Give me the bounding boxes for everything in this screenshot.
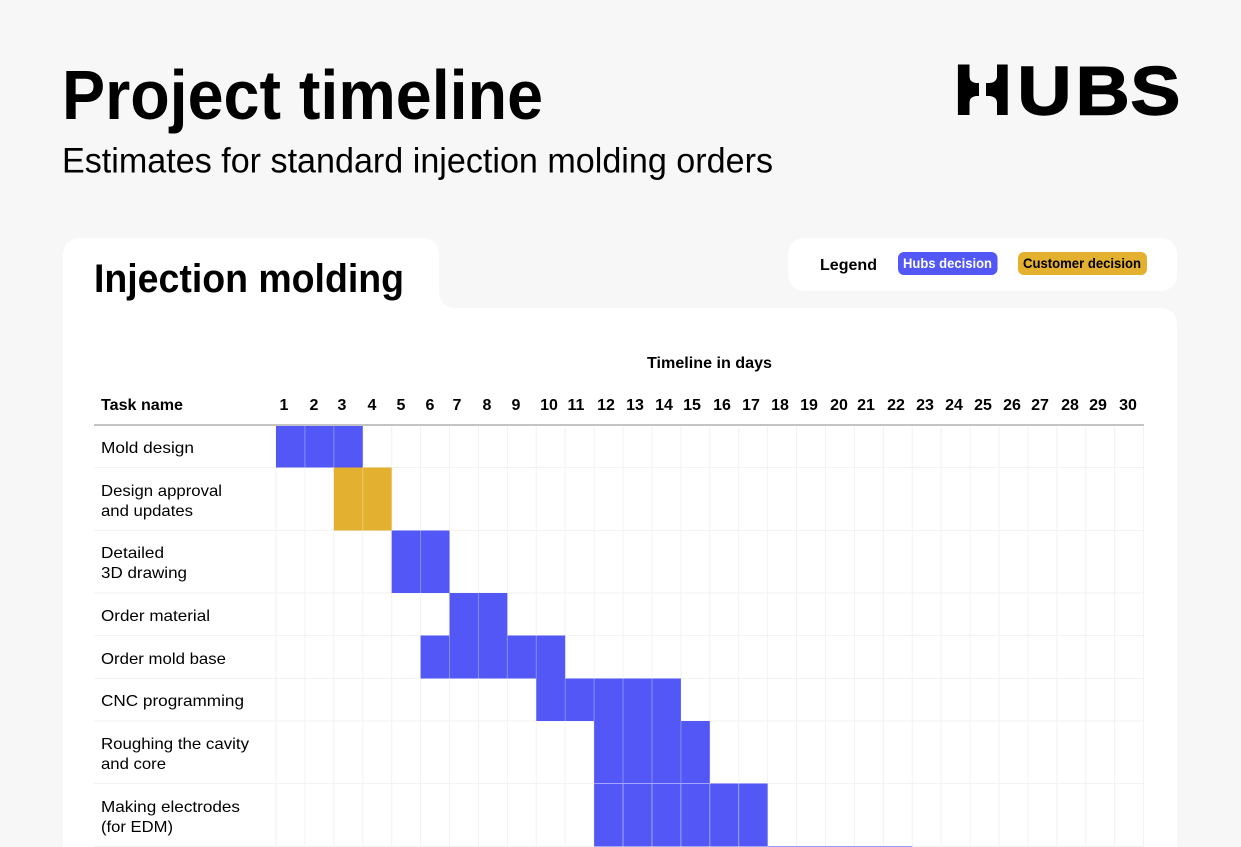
column heading: Task name: Task name [101, 397, 183, 414]
day numbers: 11 [568, 397, 585, 414]
next task bar: top edge [768, 846, 912, 847]
panel: legend: Legend [820, 257, 877, 274]
day numbers: 23 [916, 397, 934, 414]
heading: Injection molding: Injection molding [94, 257, 404, 301]
panel: legend [788, 238, 1177, 291]
task: Order material: Order material [101, 608, 210, 625]
task: Roughing the cavity and core: and core [101, 756, 166, 773]
day numbers: 16 [713, 397, 731, 414]
task: Detailed 3D drawing: 3D drawing [101, 565, 187, 582]
task: Mold design: Mold design [101, 440, 194, 457]
day numbers: 25 [974, 397, 992, 414]
task: Order mold base: Order mold base [101, 651, 226, 668]
legend item: Customer decision [1018, 252, 1147, 275]
day numbers: 29 [1089, 397, 1107, 414]
day numbers: 14 [655, 397, 673, 414]
task: Mold design [101, 426, 363, 468]
day numbers: 24 [945, 397, 963, 414]
task: Roughing the cavity and core: Roughing the cavity [101, 736, 249, 753]
day numbers: 3 [338, 397, 347, 414]
day numbers: 27 [1031, 397, 1049, 414]
legend item: Hubs decision [898, 252, 998, 275]
task: Detailed 3D drawing: Detailed [101, 545, 164, 562]
day numbers: 28 [1061, 397, 1079, 414]
task: Order material [101, 593, 507, 636]
task: Roughing the cavity and core [101, 721, 710, 784]
day numbers: 8 [483, 397, 492, 414]
day numbers: 26 [1003, 397, 1021, 414]
task: CNC programming: CNC programming [101, 693, 244, 710]
logo: Hubs [952, 49, 1180, 131]
chart heading: Timeline in days: Timeline in days [647, 355, 772, 372]
day numbers: 9 [512, 397, 521, 414]
logo: Hubs: H [952, 49, 1013, 131]
day numbers: 12 [597, 397, 615, 414]
task: Design approval and updates: and updates [101, 503, 193, 520]
day numbers: 30 [1119, 397, 1137, 414]
task: Making electrodes (for EDM): (for EDM) [101, 819, 173, 836]
day numbers: 6 [426, 397, 435, 414]
task: Order mold base [101, 636, 565, 678]
legend item: Hubs decision: Hubs decision [903, 256, 992, 271]
day numbers: 5 [397, 397, 406, 414]
logo: Hubs: UBS [1017, 53, 1180, 130]
day numbers: 18 [771, 397, 789, 414]
task: Making electrodes (for EDM): Making electrodes [101, 799, 240, 816]
day numbers: 13 [626, 397, 644, 414]
task: Detailed 3D drawing [101, 530, 450, 593]
day numbers: 22 [887, 397, 905, 414]
day numbers [280, 397, 1137, 414]
title: Project timeline [62, 56, 543, 134]
legend item: Customer decision: Customer decision [1023, 256, 1141, 271]
day numbers: 20 [830, 397, 848, 414]
day numbers: 4 [368, 397, 377, 414]
day numbers: 17 [742, 397, 760, 414]
task: Design approval and updates: Design approval [101, 483, 222, 500]
task: Making electrodes (for EDM) [101, 784, 768, 846]
day numbers: 1 [280, 397, 289, 414]
day numbers: 19 [800, 397, 818, 414]
day numbers: 21 [857, 397, 875, 414]
day numbers: 10 [540, 397, 558, 414]
day numbers: 7 [453, 397, 462, 414]
day numbers: 2 [310, 397, 319, 414]
day numbers: 15 [683, 397, 701, 414]
task: Design approval and updates [101, 468, 392, 530]
subtitle: Estimates for standard injection molding orders [62, 142, 773, 180]
task: CNC programming [101, 678, 681, 721]
